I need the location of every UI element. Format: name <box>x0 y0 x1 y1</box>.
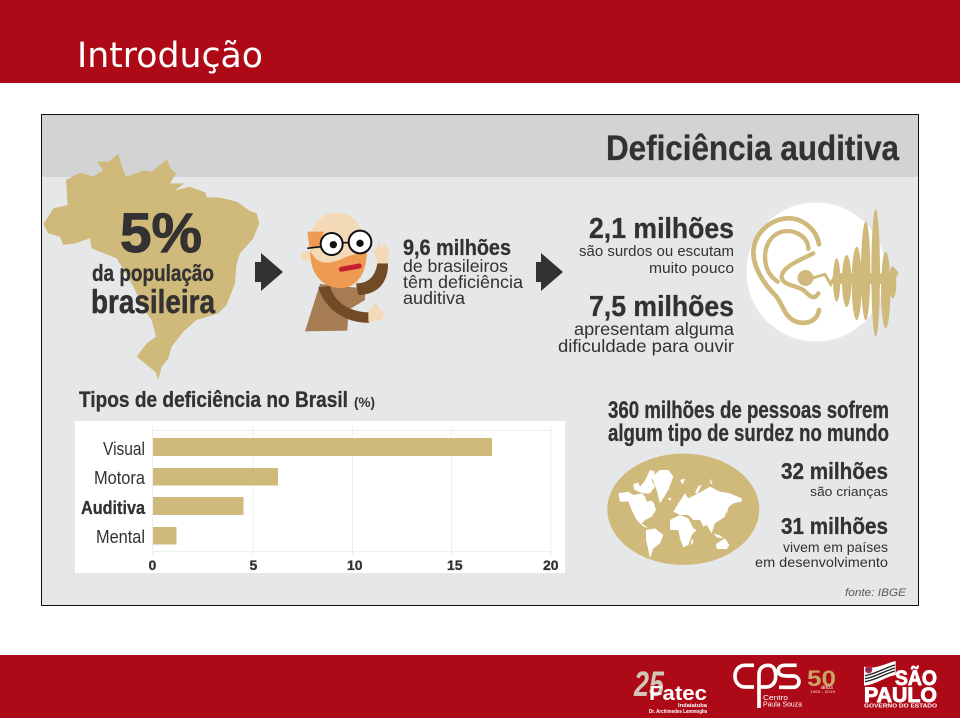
source note: fonte: IBGE <box>845 587 907 599</box>
stat: 2,1 million: 2,1 milhões <box>589 213 734 245</box>
logo: Fatec: Fatec <box>649 683 707 705</box>
stat: 2,1 million: são surdos ou escutam <box>579 243 734 260</box>
axis labels: 20 <box>543 557 559 573</box>
stat: 9,6 million <box>403 235 523 308</box>
logo: Governo de São Paulo: PAULO <box>864 684 937 707</box>
arrow <box>255 253 283 291</box>
category labels: Mental <box>96 527 145 547</box>
bars <box>153 438 492 544</box>
stat: 5 percent of population: da população <box>92 260 214 286</box>
axis labels: 0 <box>148 557 156 573</box>
category labels <box>81 439 146 547</box>
stat: 7,5 million: 7,5 milhões <box>589 291 734 323</box>
stat: 32 million: 32 milhões <box>781 458 888 484</box>
chart heading: Tipos de deficiência no Brasil <box>79 387 348 412</box>
axis labels: 15 <box>447 557 463 573</box>
stat: 2,1 million <box>579 213 734 277</box>
stat: 31 million: 31 milhões <box>781 513 888 539</box>
title: Introdução <box>77 36 263 76</box>
logo: Fatec: Dr. Archimedes Lammoglia <box>649 709 707 715</box>
category labels: Visual <box>103 439 145 459</box>
footer band <box>0 655 960 718</box>
chart heading: (%) <box>354 394 375 410</box>
stat: 7,5 million: dificuldade para ouvir <box>558 336 734 356</box>
category labels: Auditiva <box>81 498 146 518</box>
stat: 5 percent of population: 5% <box>120 201 202 264</box>
world heading: algum tipo de surdez no mundo <box>608 420 889 447</box>
stat: 31 million: vivem em países <box>783 539 888 555</box>
logo: Governo de São Paulo <box>864 661 938 710</box>
axis labels: 10 <box>347 557 363 573</box>
axis labels: 5 <box>250 557 258 573</box>
logo: Centro Paula Souza 50 anos: 50 <box>807 666 836 691</box>
logo: Centro Paula Souza 50 anos <box>735 665 836 708</box>
logo: Centro Paula Souza 50 anos: anos <box>821 685 833 691</box>
stat: 9,6 million: têm deficiência <box>403 272 523 292</box>
stat: 7,5 million: apresentam alguma <box>574 319 734 339</box>
stat: 9,6 million: de brasileiros <box>403 256 508 276</box>
logo: Centro Paula Souza 50 anos: 1969 - 2019 <box>810 689 836 694</box>
logo: Fatec: 25 <box>633 665 664 704</box>
icon: ear with sound wave <box>746 202 899 342</box>
logo: Governo de São Paulo: GOVERNO DO ESTADO <box>864 704 938 710</box>
stat: 5 percent of population: brasileira <box>91 283 216 320</box>
logo: Fatec: Indaiatuba <box>678 703 708 709</box>
header band <box>0 0 960 83</box>
stat: 9,6 million: auditiva <box>403 288 465 308</box>
map: Brazil <box>43 154 259 380</box>
icon: world map <box>607 454 759 565</box>
stat: 31 million <box>755 513 888 570</box>
panel: infographic <box>42 114 918 606</box>
logo: Centro Paula Souza 50 anos: Centro <box>763 695 788 702</box>
world heading: 360 milhões de pessoas sofrem <box>608 397 889 424</box>
stat: 9,6 million: 9,6 milhões <box>403 235 511 260</box>
logo: Centro Paula Souza 50 anos: Paula Souza <box>763 702 802 708</box>
illustration: man with hand to ear <box>301 212 389 331</box>
infographic heading: Deficiência auditiva <box>606 129 899 168</box>
logo: Governo de São Paulo: SÃO <box>895 667 937 690</box>
world heading <box>608 397 889 447</box>
stat: 32 million: são crianças <box>810 484 889 499</box>
axis labels <box>148 557 559 573</box>
category labels: Motora <box>94 468 146 488</box>
stat: 2,1 million: muito pouco <box>649 260 734 277</box>
stat: 32 million <box>781 458 889 499</box>
stat: 7,5 million <box>558 291 734 356</box>
stat: 5 percent of population <box>91 201 216 320</box>
arrow <box>536 253 563 291</box>
bar chart <box>75 421 565 573</box>
stat: 31 million: em desenvolvimento <box>755 554 888 570</box>
logo: Fatec <box>633 665 708 715</box>
